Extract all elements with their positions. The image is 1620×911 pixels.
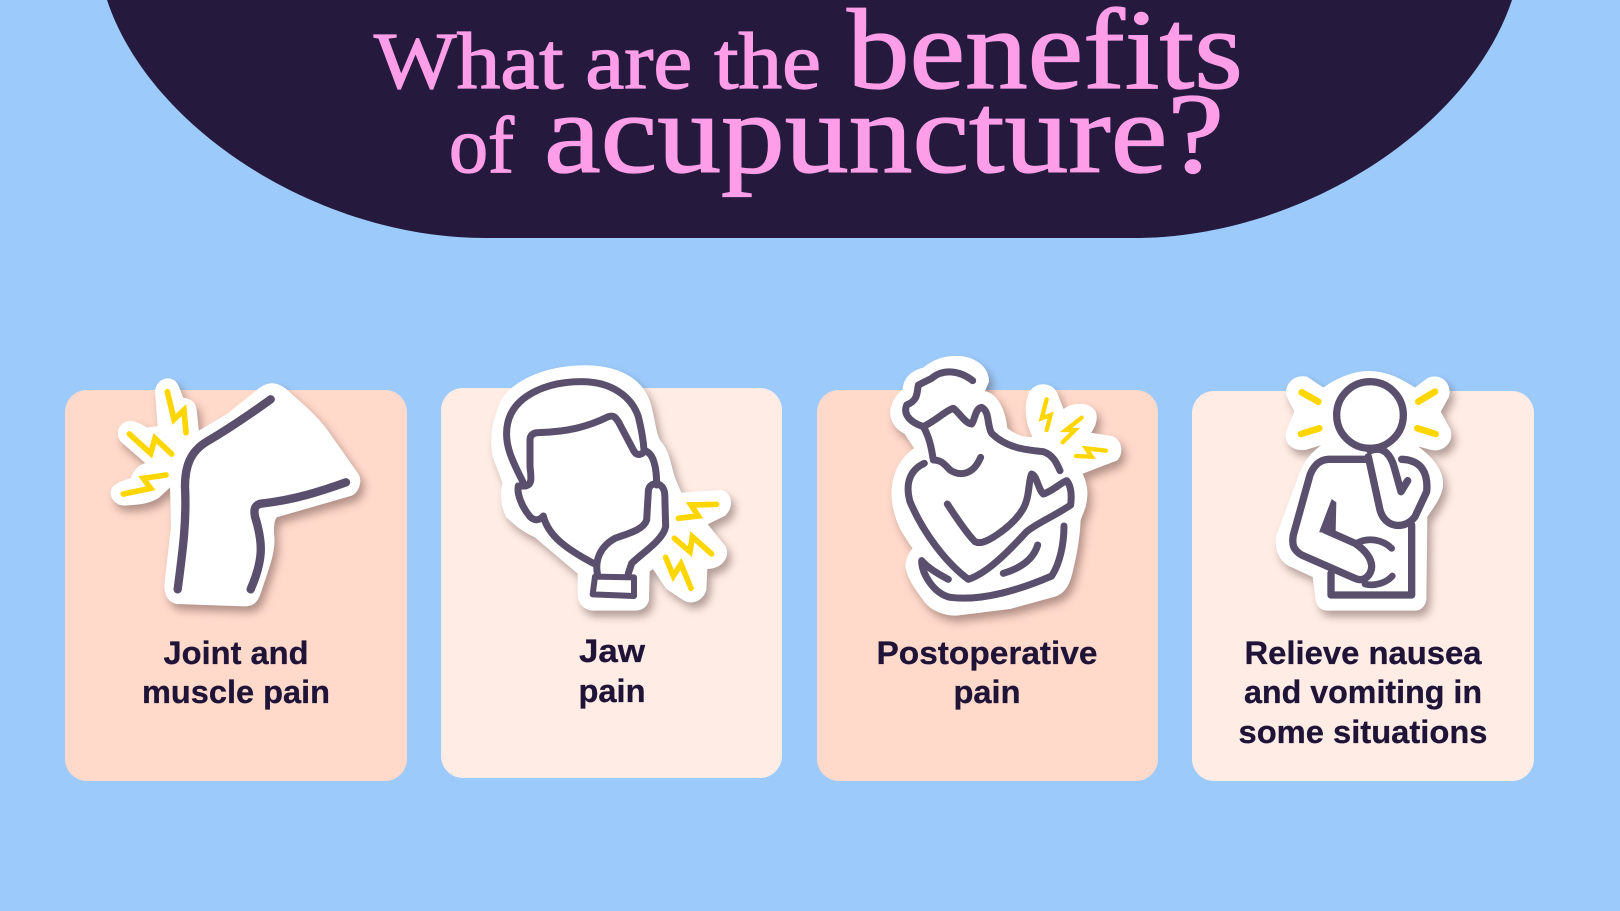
label: and vomiting in bbox=[1244, 674, 1482, 710]
card background bbox=[817, 390, 1158, 781]
title bbox=[374, 0, 1243, 197]
label bbox=[1238, 635, 1488, 750]
label: pain bbox=[578, 673, 646, 709]
icon: person holding shoulder bbox=[891, 357, 1121, 615]
title: of bbox=[449, 102, 514, 190]
icon: head holding jaw bbox=[492, 366, 730, 610]
label bbox=[876, 635, 1098, 710]
label: some situations bbox=[1238, 714, 1488, 750]
title: acupuncture? bbox=[544, 70, 1224, 197]
label: muscle pain bbox=[142, 674, 330, 710]
card background bbox=[441, 388, 782, 778]
header banner bbox=[107, 0, 1512, 238]
label: Relieve nausea bbox=[1244, 635, 1482, 671]
label: Postoperative bbox=[876, 635, 1098, 671]
label: Jaw bbox=[579, 633, 645, 669]
label: Joint and bbox=[164, 635, 308, 671]
panel: relieve nausea and vomiting bbox=[1192, 372, 1534, 781]
label bbox=[142, 635, 330, 710]
label: pain bbox=[954, 674, 1020, 710]
title: What are the bbox=[374, 18, 821, 106]
panel: joint and muscle pain bbox=[65, 379, 407, 781]
card background bbox=[65, 390, 407, 781]
label bbox=[578, 633, 646, 709]
panel: postoperative pain bbox=[817, 357, 1158, 781]
panel: jaw pain bbox=[441, 366, 782, 778]
icon: knee with pain bolts bbox=[111, 379, 360, 606]
icon: nauseous person bbox=[1276, 372, 1451, 610]
card background bbox=[1192, 391, 1534, 781]
